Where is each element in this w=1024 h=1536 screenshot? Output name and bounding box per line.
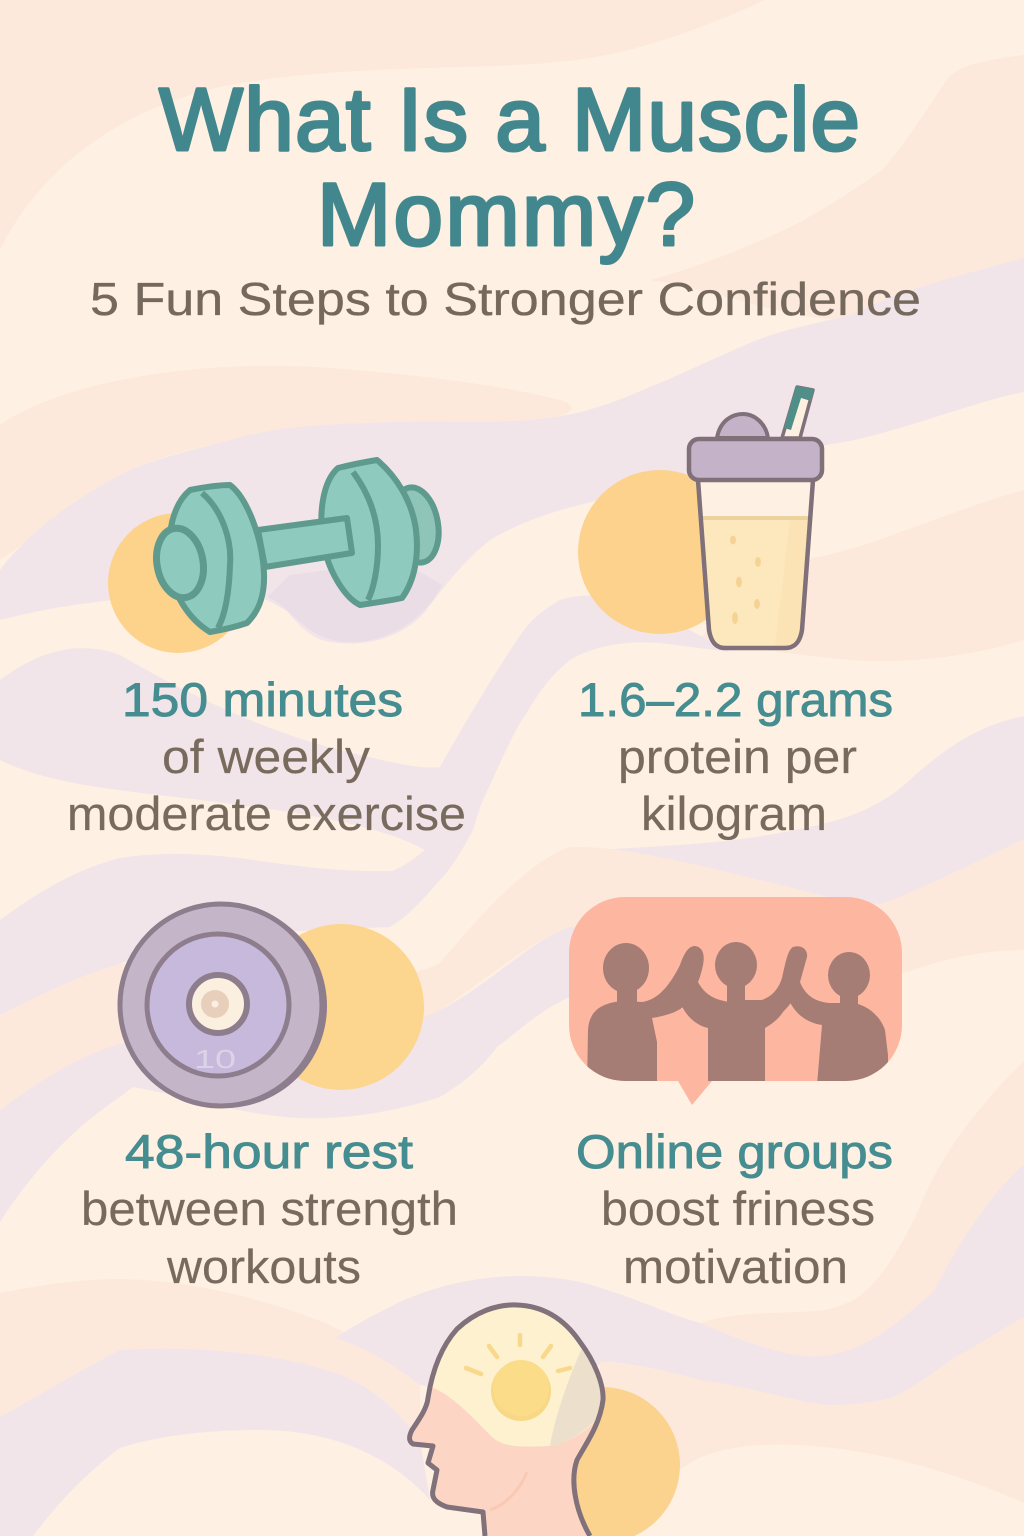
dumbbell shadow xyxy=(267,560,442,642)
label: protein grams: protein per xyxy=(618,730,857,783)
yellow circle xyxy=(108,513,248,653)
sun xyxy=(491,1361,551,1421)
inner ring xyxy=(147,934,289,1076)
yellow circle xyxy=(578,470,742,634)
dumbbell left plate xyxy=(169,485,264,632)
centre person xyxy=(680,942,807,1085)
right person xyxy=(788,952,888,1085)
label: 150 minutes: 150 minutes xyxy=(122,673,403,726)
subtitle: 5 Fun Steps to Stronger Confidence xyxy=(90,273,921,325)
label: online groups: boost friness xyxy=(601,1182,875,1235)
label: protein grams: 1.6–2.2 grams xyxy=(578,673,893,726)
people high-fiving xyxy=(587,942,888,1085)
label: protein grams xyxy=(578,673,893,840)
label: 48-hour rest: workouts xyxy=(166,1240,361,1293)
icon: head with sun xyxy=(400,1300,680,1536)
label: 48-hour rest: 48-hour rest xyxy=(125,1125,413,1178)
sun rays xyxy=(466,1335,570,1374)
label: online groups: motivation xyxy=(623,1240,848,1293)
dumbbell left end cap xyxy=(151,525,209,601)
icon: dumbbell xyxy=(108,460,444,653)
droplets xyxy=(730,536,761,624)
plate face xyxy=(120,904,322,1106)
label: online groups xyxy=(576,1125,893,1293)
cup xyxy=(697,480,813,648)
lid xyxy=(689,439,822,480)
head outline xyxy=(410,1305,603,1536)
label: 48-hour rest: between strength xyxy=(81,1182,458,1235)
dumbbell bar xyxy=(258,518,352,567)
left person xyxy=(587,943,704,1085)
cup outline xyxy=(698,480,813,648)
title: Mommy? xyxy=(317,164,695,264)
icon: community speech bubble xyxy=(569,897,902,1105)
label: 48-hour rest xyxy=(81,1125,458,1293)
label: 150 minutes: moderate exercise xyxy=(67,787,466,840)
brain shade xyxy=(550,1349,600,1446)
liquid xyxy=(699,517,811,646)
dumbbell right plate xyxy=(321,460,417,605)
label: 150 minutes: of weekly xyxy=(162,730,371,783)
bubble xyxy=(569,897,902,1105)
label: protein grams: kilogram xyxy=(641,787,827,840)
title: What Is a Muscle xyxy=(159,69,860,169)
dumbbell right end cap xyxy=(388,484,444,566)
icon: protein shaker xyxy=(578,386,822,648)
icon: weight plate xyxy=(120,904,424,1108)
yellow circle xyxy=(258,924,424,1090)
brain area xyxy=(432,1308,595,1446)
label: 150 minutes xyxy=(67,673,466,840)
hub xyxy=(189,975,247,1033)
straw xyxy=(782,387,813,438)
head fill xyxy=(412,1308,601,1536)
plate number: 10 xyxy=(194,1044,236,1074)
jaw shade xyxy=(490,1472,527,1510)
title xyxy=(159,69,860,264)
plate rim xyxy=(123,904,327,1108)
label: online groups: Online groups xyxy=(576,1125,893,1178)
yellow circle xyxy=(524,1387,680,1536)
lid dome xyxy=(717,414,768,438)
